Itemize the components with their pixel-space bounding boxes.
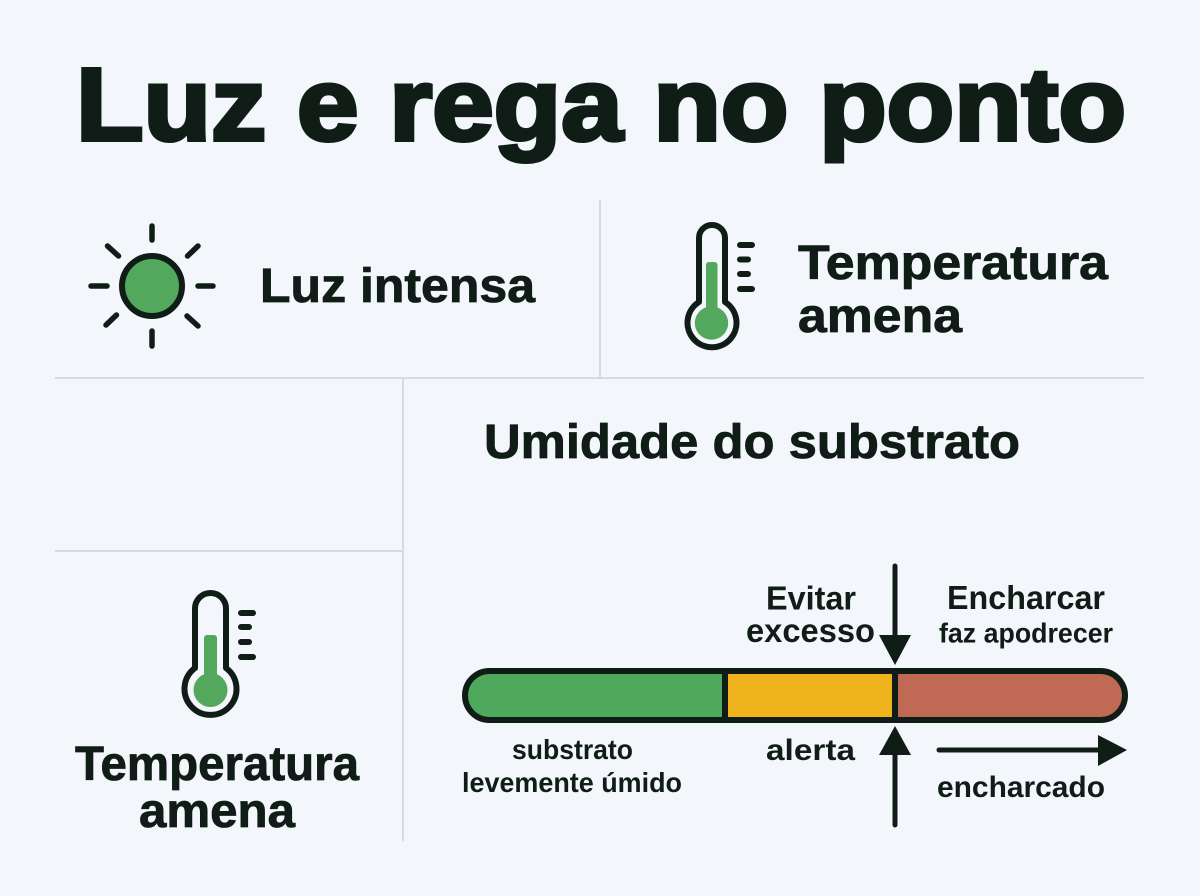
arrow: up to threshold <box>879 726 911 825</box>
panel: temperatura amena (top) <box>688 225 1121 347</box>
callout: evitar excesso: excesso <box>746 612 875 649</box>
callout: encharcar faz apodrecer: faz apodrecer <box>939 618 1113 648</box>
arrow: down to threshold <box>879 566 911 665</box>
heading: umidade do substrato: Umidade do substrato <box>484 416 1020 469</box>
label: substrato levemente umido: substrato <box>512 734 633 765</box>
label: temperatura amena: Temperatura <box>75 738 359 791</box>
moisture scale bar <box>465 671 1125 720</box>
icon: thermometer <box>184 593 253 715</box>
label: encharcado: encharcado <box>937 771 1105 804</box>
title: Luz e rega no ponto <box>76 47 1126 162</box>
label: luz intensa: Luz intensa <box>260 260 535 313</box>
label: temperatura amena: Temperatura <box>798 237 1108 290</box>
icon: sun <box>91 226 213 346</box>
panel: umidade do substrato <box>462 416 1127 825</box>
callout: evitar excesso: Evitar <box>766 580 856 616</box>
callout: encharcar faz apodrecer: Encharcar <box>947 579 1105 616</box>
label: substrato levemente umido: levemente úmido <box>462 767 682 798</box>
panel: temperatura amena (bottom left) <box>75 593 372 838</box>
panel: luz intensa <box>91 226 535 346</box>
label: alerta: alerta <box>766 734 855 767</box>
label: temperatura amena: amena <box>139 785 295 838</box>
label: temperatura amena: amena <box>798 290 962 343</box>
arrow: right to soaked <box>939 735 1127 766</box>
icon: thermometer <box>688 225 752 347</box>
